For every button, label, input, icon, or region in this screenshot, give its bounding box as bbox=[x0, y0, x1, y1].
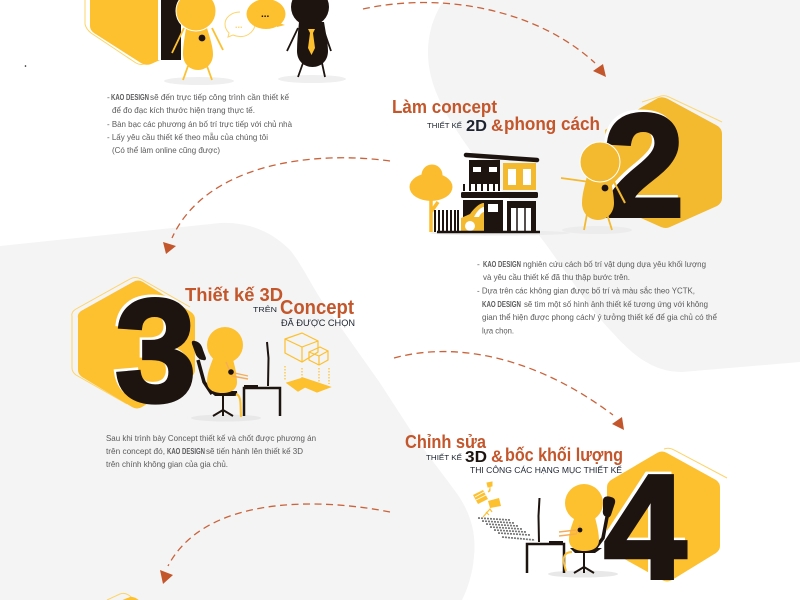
text block 3: Sau khi trình bày Concept thiết kế và chốt được phương án bbox=[106, 433, 316, 443]
title 3: Concept bbox=[280, 297, 354, 319]
arrow 4 to 5 bbox=[160, 504, 390, 584]
speech bubbles: ... bbox=[235, 20, 243, 30]
plan stack bbox=[478, 518, 535, 540]
character: yellow person bbox=[164, 0, 234, 85]
text block 3 bbox=[106, 433, 316, 469]
arrow 1 to 2 bbox=[363, 3, 606, 77]
text block 3: trên chính không gian của gia chủ. bbox=[106, 459, 228, 469]
title 3: Thiết kế 3D bbox=[185, 285, 283, 305]
body bbox=[569, 514, 599, 551]
step 1 panel bbox=[85, 0, 346, 155]
text block 2: lựa chọn. bbox=[482, 326, 514, 336]
body bbox=[207, 356, 237, 393]
title 4 bbox=[405, 432, 623, 475]
chair bbox=[192, 341, 237, 416]
desk bbox=[244, 388, 280, 416]
title 2: 2D bbox=[466, 118, 487, 135]
speech bubbles: ... bbox=[261, 9, 270, 20]
character at desk bbox=[527, 484, 618, 578]
hexagon 1 bbox=[85, 0, 160, 65]
title 2: & bbox=[491, 116, 503, 135]
title 4: Chỉnh sửa bbox=[405, 432, 487, 452]
text block 1 bbox=[107, 92, 292, 155]
title 4: THI CÔNG CÁC HẠNG MỤC THIẾT KẾ bbox=[470, 465, 622, 475]
text block 2: và yêu cầu thiết kế đã thu thập bước trên. bbox=[483, 272, 630, 282]
text block 3: trên concept đó, bbox=[106, 446, 165, 456]
text block 2: - Dựa trên các không gian được bố trí và màu sắc theo YCTK, bbox=[477, 286, 695, 296]
title 3 bbox=[185, 285, 355, 328]
icons: floating furniture bbox=[473, 482, 501, 517]
title 3: TRÊN bbox=[253, 305, 277, 314]
text block 1: để đo đạc kích thước hiện trạng thực tế. bbox=[112, 105, 255, 115]
hexagon 5 top edge bbox=[107, 593, 140, 600]
hexagon 4 bbox=[607, 448, 727, 582]
number 3: 3 bbox=[112, 266, 194, 430]
text block 2: sẽ tìm một số hình ảnh thiết kế tương ứng với không bbox=[524, 299, 708, 309]
number 2: 2 bbox=[600, 82, 682, 244]
step 3 panel bbox=[72, 266, 355, 469]
title 2: Làm concept bbox=[392, 97, 497, 117]
text block 1: - bbox=[107, 92, 110, 102]
text block 2: - bbox=[477, 259, 480, 269]
text block 1: (Có thể làm online cũng được) bbox=[112, 145, 220, 155]
text block 3: sẽ tiến hành lên thiết kế 3D bbox=[206, 446, 303, 456]
chair bbox=[570, 496, 615, 573]
character: black person with tie bbox=[278, 0, 346, 83]
background blob: left bbox=[0, 223, 474, 600]
hexagon 2 bbox=[605, 96, 722, 228]
text block 1: KAO DESIGN bbox=[111, 92, 149, 102]
monitor bbox=[538, 498, 540, 542]
tree bbox=[410, 164, 452, 232]
title 4: & bbox=[491, 447, 503, 466]
number 2: 2 bbox=[603, 84, 684, 247]
desk bbox=[527, 544, 564, 573]
text block 2: gian thể hiện được phong cách/ ý tưởng thiết kế để gia chủ có thể bbox=[482, 312, 717, 322]
text block 2 bbox=[477, 259, 717, 336]
title 2 bbox=[392, 97, 600, 135]
text block 1: sẽ đến trực tiếp công trình cần thiết kế bbox=[150, 92, 289, 102]
step 4 panel bbox=[405, 432, 727, 600]
text block 2: nghiên cứu cách bố trí vật dụng dựa yêu khối lượng bbox=[523, 259, 706, 269]
title 4: bốc khối lượng bbox=[505, 445, 623, 465]
arrow 2 to 3 bbox=[163, 158, 390, 254]
character at desk bbox=[191, 327, 280, 422]
character: yellow person pointing bbox=[561, 142, 632, 234]
text block 2: KAO DESIGN bbox=[482, 299, 521, 309]
text block 1: - Bàn bạc các phương án bố trí trực tiếp với chủ nhà bbox=[107, 119, 292, 129]
stray dot bbox=[25, 65, 26, 67]
title 3: ĐÃ ĐƯỢC CHỌN bbox=[281, 318, 355, 328]
number 3: 3 bbox=[115, 269, 196, 432]
title 4: 3D bbox=[465, 449, 487, 466]
title 4: THIẾT KẾ bbox=[426, 452, 462, 462]
hexagon 3 bbox=[72, 278, 195, 408]
arrow 3 to 4 bbox=[394, 352, 624, 430]
title 2: phong cách bbox=[504, 114, 600, 134]
house bbox=[437, 155, 540, 232]
text block 2: KAO DESIGN bbox=[483, 259, 521, 269]
text block 1: - Lấy yêu cầu thiết kế theo mẫu của chúng tôi bbox=[107, 132, 268, 142]
house illustration bbox=[410, 155, 570, 236]
speech bubbles bbox=[225, 0, 286, 37]
text block 3: KAO DESIGN bbox=[167, 446, 205, 456]
number 1 bbox=[158, 0, 181, 60]
icon: 3D cubes bbox=[285, 333, 330, 392]
title 2: THIẾT KẾ bbox=[427, 120, 462, 130]
background blob: top right bbox=[428, 0, 800, 372]
monitor bbox=[267, 342, 268, 386]
step 2 panel bbox=[392, 82, 722, 336]
fence bbox=[435, 210, 458, 232]
